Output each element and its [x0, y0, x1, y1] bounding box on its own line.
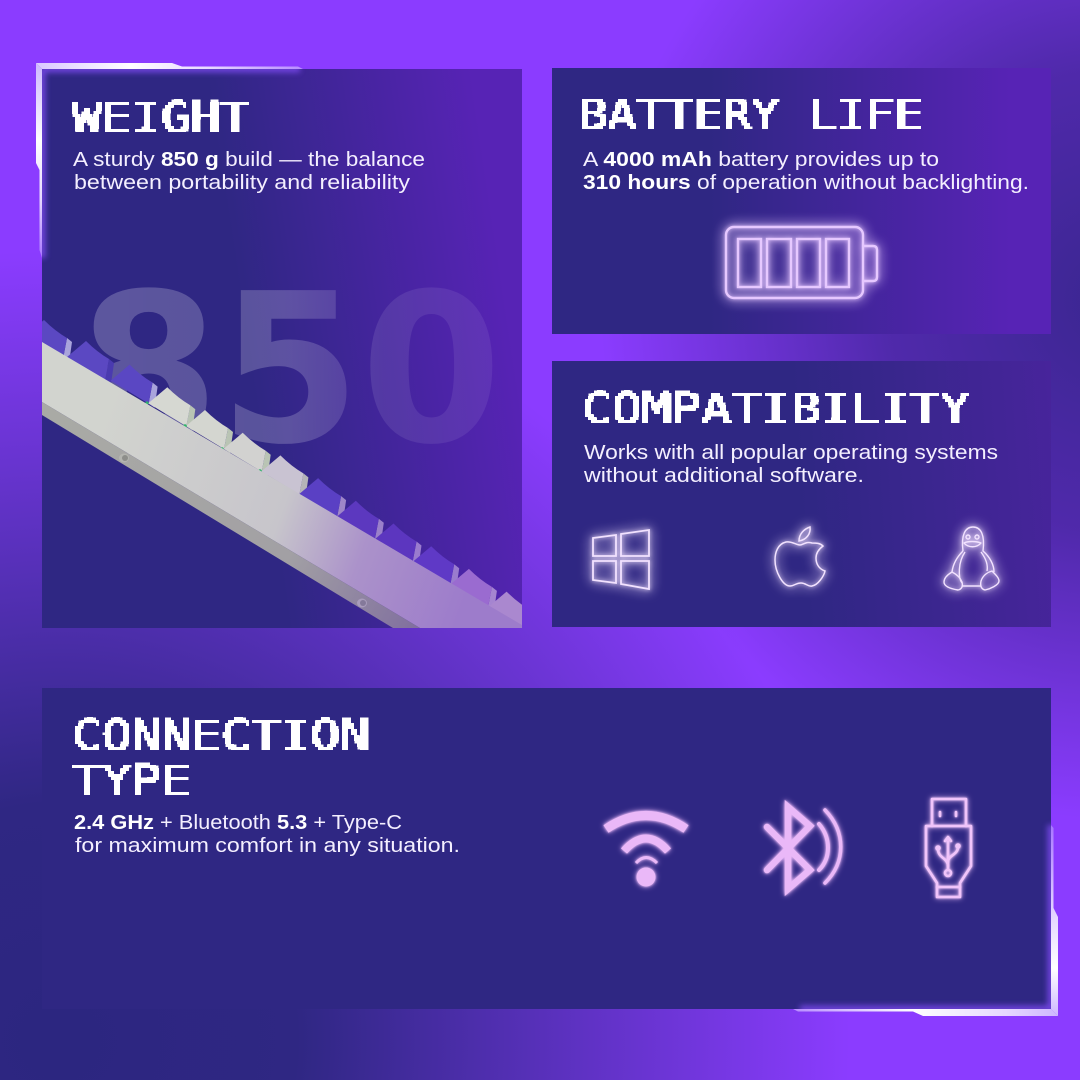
inner edge glow: [800, 825, 1051, 1009]
compatibility panel background: [552, 361, 1051, 627]
connection heading: [72, 711, 370, 805]
compatibility heading: COMPATIBILITY: [582, 384, 970, 433]
icon: wifi: [606, 816, 686, 886]
battery description: A 4000 mAh battery provides up to: [583, 148, 939, 171]
keyboard lower strip: [42, 402, 420, 628]
icon: windows: [593, 530, 649, 589]
screw holes: [119, 454, 367, 608]
connection description: for maximum comfort in any situation.: [75, 834, 460, 857]
battery description: 310 hours of operation without backlighting.: [583, 171, 1029, 194]
weight panel background: [42, 69, 522, 628]
icon: usb: [926, 799, 971, 897]
keycaps: [25, 320, 530, 631]
green backlight dots: [145, 401, 262, 473]
large number 850: 850: [78, 249, 502, 490]
connection panel background: [42, 688, 1051, 1009]
connection heading: TYPE: [72, 756, 191, 805]
frame accent: top left: [36, 63, 303, 258]
icon: linux penguin: [944, 527, 999, 590]
battery heading: BATTERY LIFE: [579, 90, 923, 139]
compatibility description: [583, 441, 998, 487]
panel: compatibility: [552, 361, 1051, 627]
weight description: between portability and reliability: [74, 171, 411, 194]
icon: battery: [726, 227, 877, 298]
connection heading: CONNECTION: [72, 711, 370, 760]
icon: apple: [775, 527, 825, 586]
compatibility description: without additional software.: [583, 464, 864, 487]
connection description: [74, 811, 460, 857]
connection description: 2.4 GHz + Bluetooth 5.3 + Type-C: [74, 811, 402, 834]
frame accent: bottom right: [793, 825, 1058, 1016]
battery description: [583, 148, 1029, 194]
icon: bluetooth: [767, 807, 841, 889]
panel: battery life: [552, 68, 1051, 334]
weight description: [73, 148, 425, 194]
keyboard top face: [42, 342, 522, 628]
battery panel background: [552, 68, 1051, 334]
panel: weight: [25, 69, 530, 631]
panel: connection type: [42, 688, 1051, 1009]
keyboard illustration: [25, 320, 530, 631]
compatibility description: Works with all popular operating systems: [584, 441, 998, 464]
weight heading: WEIGHT: [72, 93, 250, 142]
weight description: A sturdy 850 g build — the balance: [73, 148, 425, 171]
